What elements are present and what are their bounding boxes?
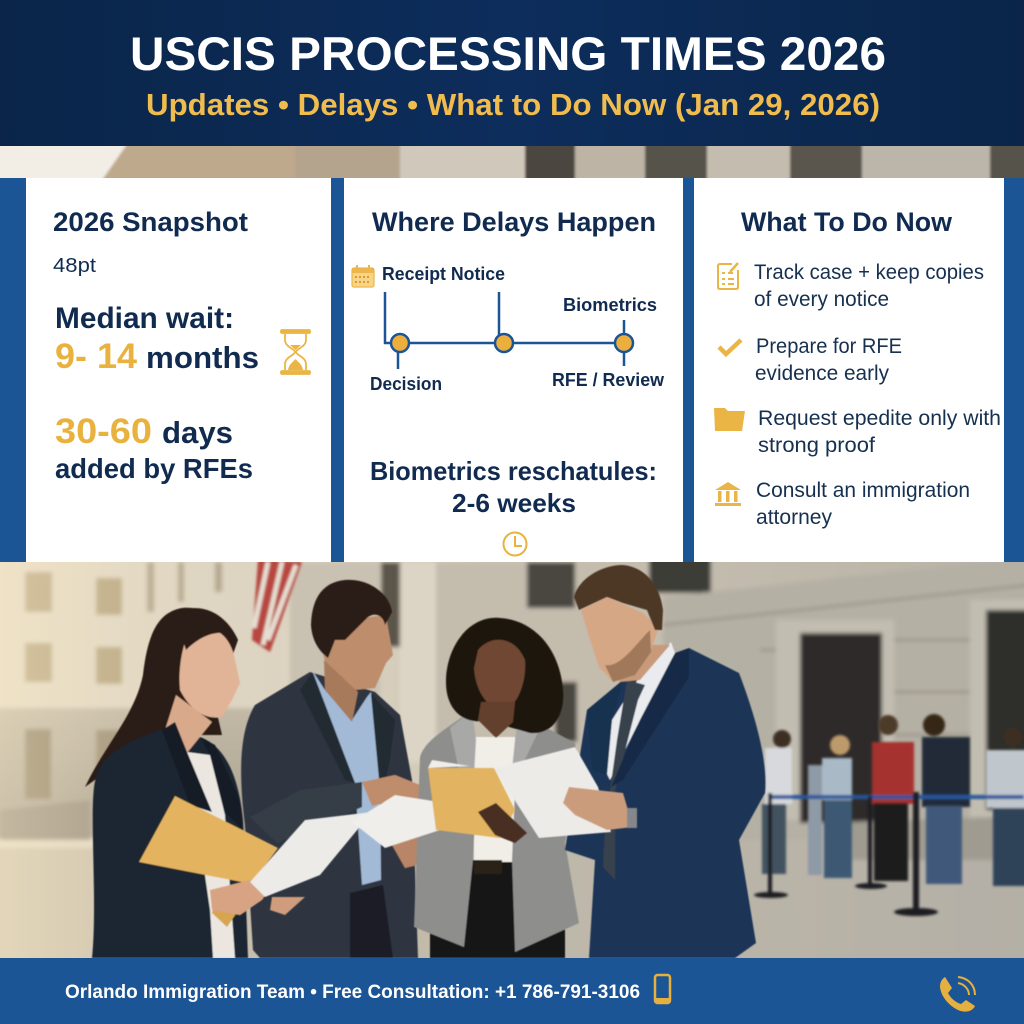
person: woman in grey blazer — [414, 618, 579, 958]
median wait value: months — [146, 340, 259, 375]
subtitle: Updates • Delays • What to Do Now (Jan 29, 2026) — [146, 87, 880, 122]
panel: where delays happen — [344, 178, 683, 562]
timeline chart — [385, 292, 633, 369]
icon: checklist — [718, 263, 738, 289]
label: Decision: Decision — [370, 374, 442, 394]
step text: prepare: evidence early — [755, 362, 889, 385]
sunlight glow — [0, 562, 128, 958]
step text: track case: of every notice — [754, 288, 889, 311]
icon: check mark — [719, 340, 741, 354]
footer bar — [0, 958, 1024, 1024]
step text: track case: Track case + keep copies — [754, 261, 984, 284]
person: man in grey blazer — [241, 580, 434, 958]
timeline node: receipt — [495, 334, 513, 352]
step text: expedite — [758, 407, 1001, 457]
step text: consult — [756, 479, 970, 529]
step text: prepare: Prepare for RFE — [756, 335, 902, 358]
icon: clock — [504, 532, 526, 556]
icon: hourglass — [281, 330, 310, 374]
panel: 2026 snapshot — [26, 178, 331, 562]
label: Biometrics: Biometrics — [563, 295, 657, 315]
footer contact text: Orlando Immigration Team • Free Consultation: +1 786-791-3106 — [65, 982, 640, 1003]
icon: smartphone — [655, 975, 670, 1003]
median wait value: 9- 14 — [55, 337, 138, 376]
RFE days value — [55, 412, 233, 451]
timeline node: decision — [391, 334, 409, 352]
biometrics callout: 2-6 weeks — [452, 488, 576, 518]
step text: consult: attorney — [756, 506, 832, 529]
icon: bank building — [715, 482, 741, 506]
blue band behind panels — [0, 178, 1024, 562]
queue of people — [754, 714, 1024, 916]
label: RFE / Review: RFE / Review — [552, 370, 665, 390]
icon: calendar — [352, 265, 374, 287]
step text: expedite: strong proof — [758, 434, 875, 457]
timeline node: biometrics — [615, 334, 633, 352]
building photo strip — [0, 146, 1024, 178]
small note: 48pt — [53, 255, 96, 277]
heading: Where Delays Happen: Where Delays Happen — [372, 207, 656, 237]
heading: 2026 Snapshot: 2026 Snapshot — [53, 207, 248, 237]
step text: prepare — [755, 335, 902, 385]
documents and hands in the foreground — [250, 747, 637, 897]
panel: what to do now — [694, 178, 1004, 562]
title: USCIS PROCESSING TIMES 2026 — [130, 27, 886, 80]
heading: What To Do Now: What To Do Now — [741, 207, 953, 237]
RFE days value: 30-60 — [55, 412, 152, 451]
photo: team reviewing documents outside USCIS building — [0, 540, 1024, 980]
icon: folder — [714, 408, 745, 431]
flag — [252, 560, 302, 652]
person: woman with yellow folder — [85, 608, 305, 958]
person: man in navy suit — [565, 565, 765, 958]
label: Receipt Notice: Receipt Notice — [382, 264, 505, 284]
icon: phone with signal — [940, 977, 975, 1012]
biometrics callout: Biometrics reschatules: — [370, 456, 657, 486]
step text: track case — [754, 261, 984, 311]
header banner — [0, 0, 1024, 146]
step text: consult: Consult an immigration — [756, 479, 970, 502]
biometrics callout — [370, 456, 657, 518]
step text: expedite: Request epedite only with — [758, 407, 1001, 430]
median wait value — [55, 337, 259, 376]
median wait label: Median wait: — [55, 302, 234, 335]
RFE days label: added by RFEs — [55, 453, 253, 484]
photo background: building — [0, 540, 1024, 980]
RFE days value: days — [162, 415, 233, 450]
